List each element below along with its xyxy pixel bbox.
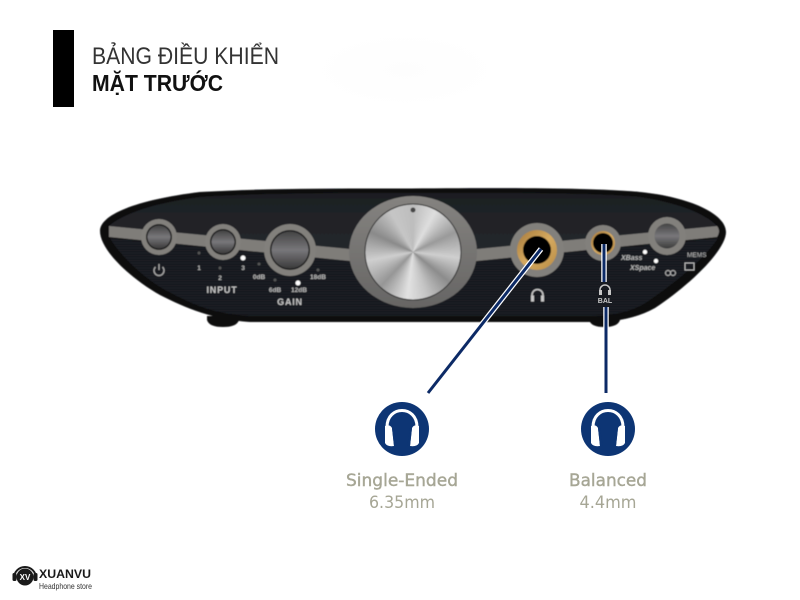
background smudge bbox=[310, 32, 500, 108]
heading: BẢNG ĐIỀU KHIỂN bbox=[92, 41, 279, 70]
brushed lower panel bbox=[110, 238, 718, 316]
label: balanced bbox=[569, 471, 647, 512]
BAL label: BAL bbox=[598, 298, 613, 305]
callout line: balanced bbox=[604, 244, 606, 393]
xbass xspace mems labels: MEMS bbox=[687, 252, 707, 259]
callout line: single-ended bbox=[428, 249, 541, 393]
title accent bar bbox=[53, 30, 74, 107]
xbass xspace mems labels: XSpace bbox=[629, 265, 655, 272]
icon: single-ended headphones bbox=[375, 402, 429, 456]
device body bbox=[100, 188, 726, 322]
input labels and LEDs: 2 bbox=[218, 275, 222, 282]
heading: MẶT TRƯỚC bbox=[92, 69, 223, 96]
logo text: XUANVU bbox=[39, 567, 91, 581]
button: power bbox=[141, 219, 177, 255]
gain labels and LEDs: GAIN bbox=[277, 297, 303, 307]
icon: balanced headphones bbox=[581, 402, 635, 456]
label: balanced: Balanced bbox=[569, 471, 647, 490]
foot: left bbox=[207, 316, 239, 327]
button: gain bbox=[264, 224, 316, 276]
gain labels and LEDs bbox=[253, 262, 326, 307]
gain labels and LEDs: 18dB bbox=[310, 274, 326, 281]
input labels and LEDs bbox=[197, 252, 246, 295]
logo text bbox=[39, 567, 92, 591]
logo icon: XV bbox=[20, 573, 31, 582]
label: single-ended: 6.35mm bbox=[369, 493, 435, 512]
gain labels and LEDs: 6dB bbox=[269, 287, 281, 294]
heading bbox=[92, 41, 279, 96]
foot: right bbox=[589, 316, 620, 327]
xbass xspace mems labels bbox=[620, 250, 707, 276]
BAL label bbox=[598, 285, 613, 305]
volume knob bbox=[349, 196, 477, 308]
input labels and LEDs: 3 bbox=[241, 265, 245, 272]
logo text: Headphone store bbox=[39, 581, 92, 591]
grey band bbox=[109, 226, 719, 261]
icon: small headphone bbox=[531, 290, 544, 302]
gain labels and LEDs: 12dB bbox=[291, 287, 307, 294]
button: mode bbox=[648, 217, 686, 255]
icon: power bbox=[154, 264, 164, 276]
label: single-ended: Single-Ended bbox=[346, 471, 458, 490]
input labels and LEDs: INPUT bbox=[206, 285, 238, 295]
jack: 4.4mm bbox=[585, 225, 621, 261]
xbass xspace mems labels: XBass bbox=[620, 255, 643, 262]
device: amplifier front panel bbox=[100, 188, 726, 327]
logo: Xuan Vu bbox=[12, 567, 92, 591]
button: input bbox=[205, 224, 241, 260]
label: single-ended bbox=[346, 471, 458, 512]
gain labels and LEDs: 0dB bbox=[253, 274, 265, 281]
jack: 6.35mm bbox=[510, 223, 564, 277]
upper panel bbox=[109, 193, 717, 250]
label: balanced: 4.4mm bbox=[580, 493, 636, 512]
input labels and LEDs: 1 bbox=[197, 265, 201, 272]
